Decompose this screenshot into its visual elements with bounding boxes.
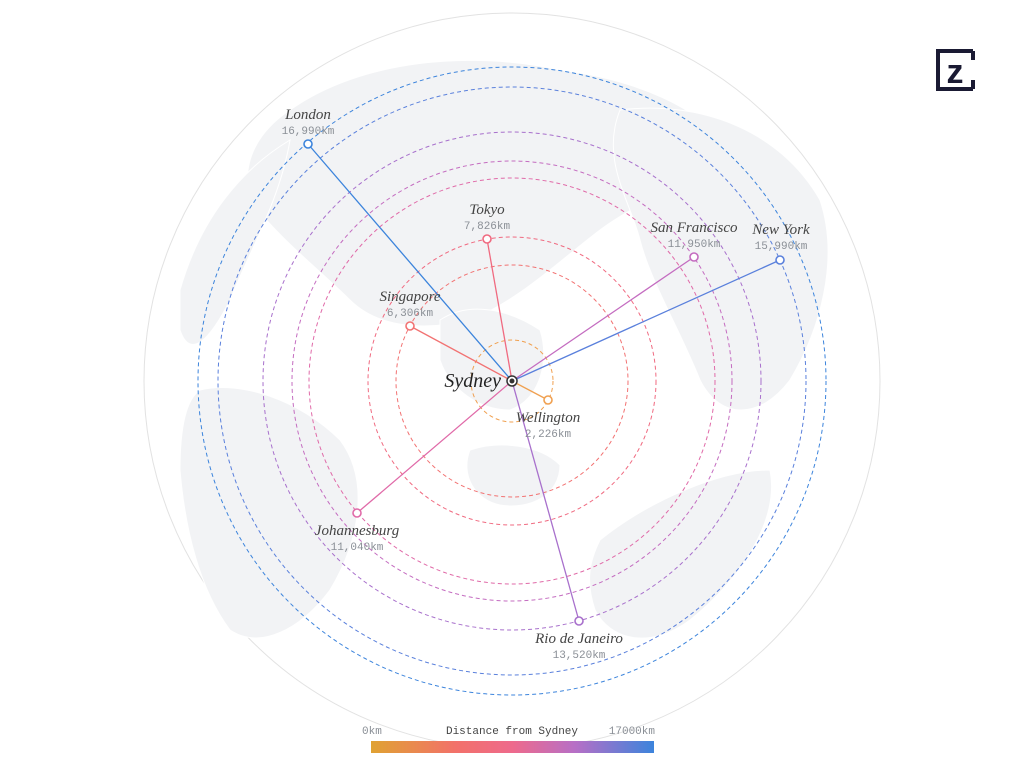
- city labels: London: [284, 107, 331, 123]
- city labels: 13,520km: [553, 650, 606, 662]
- city labels: 15,990km: [755, 241, 808, 253]
- city labels: 11,950km: [668, 239, 721, 251]
- land masses: [180, 60, 828, 638]
- city labels: 11,040km: [331, 542, 384, 554]
- city labels: Singapore: [379, 289, 441, 305]
- distance rings: [198, 67, 826, 695]
- city labels: Tokyo: [469, 202, 505, 218]
- city labels: Johannesburg: [315, 523, 400, 539]
- city labels: 7,826km: [464, 221, 510, 233]
- city labels: Sydney: [444, 370, 501, 392]
- city labels: [282, 107, 810, 662]
- city labels: 16,990km: [282, 126, 335, 138]
- logo: [938, 51, 973, 91]
- Sydney marker: [507, 376, 517, 386]
- city labels: 6,306km: [387, 308, 433, 320]
- legend: 17000km: [609, 726, 655, 738]
- legend: 0km: [362, 726, 382, 738]
- city labels: Rio de Janeiro: [534, 631, 623, 647]
- legend: [362, 726, 655, 753]
- city labels: 2,226km: [525, 429, 571, 441]
- city labels: Wellington: [516, 410, 580, 426]
- legend: Distance from Sydney: [446, 726, 578, 738]
- logo: z: [946, 53, 964, 91]
- city markers: [304, 140, 784, 625]
- city labels: New York: [751, 222, 810, 238]
- route lines: [308, 144, 780, 621]
- city labels: San Francisco: [650, 220, 738, 236]
- globe outline: [144, 13, 880, 749]
